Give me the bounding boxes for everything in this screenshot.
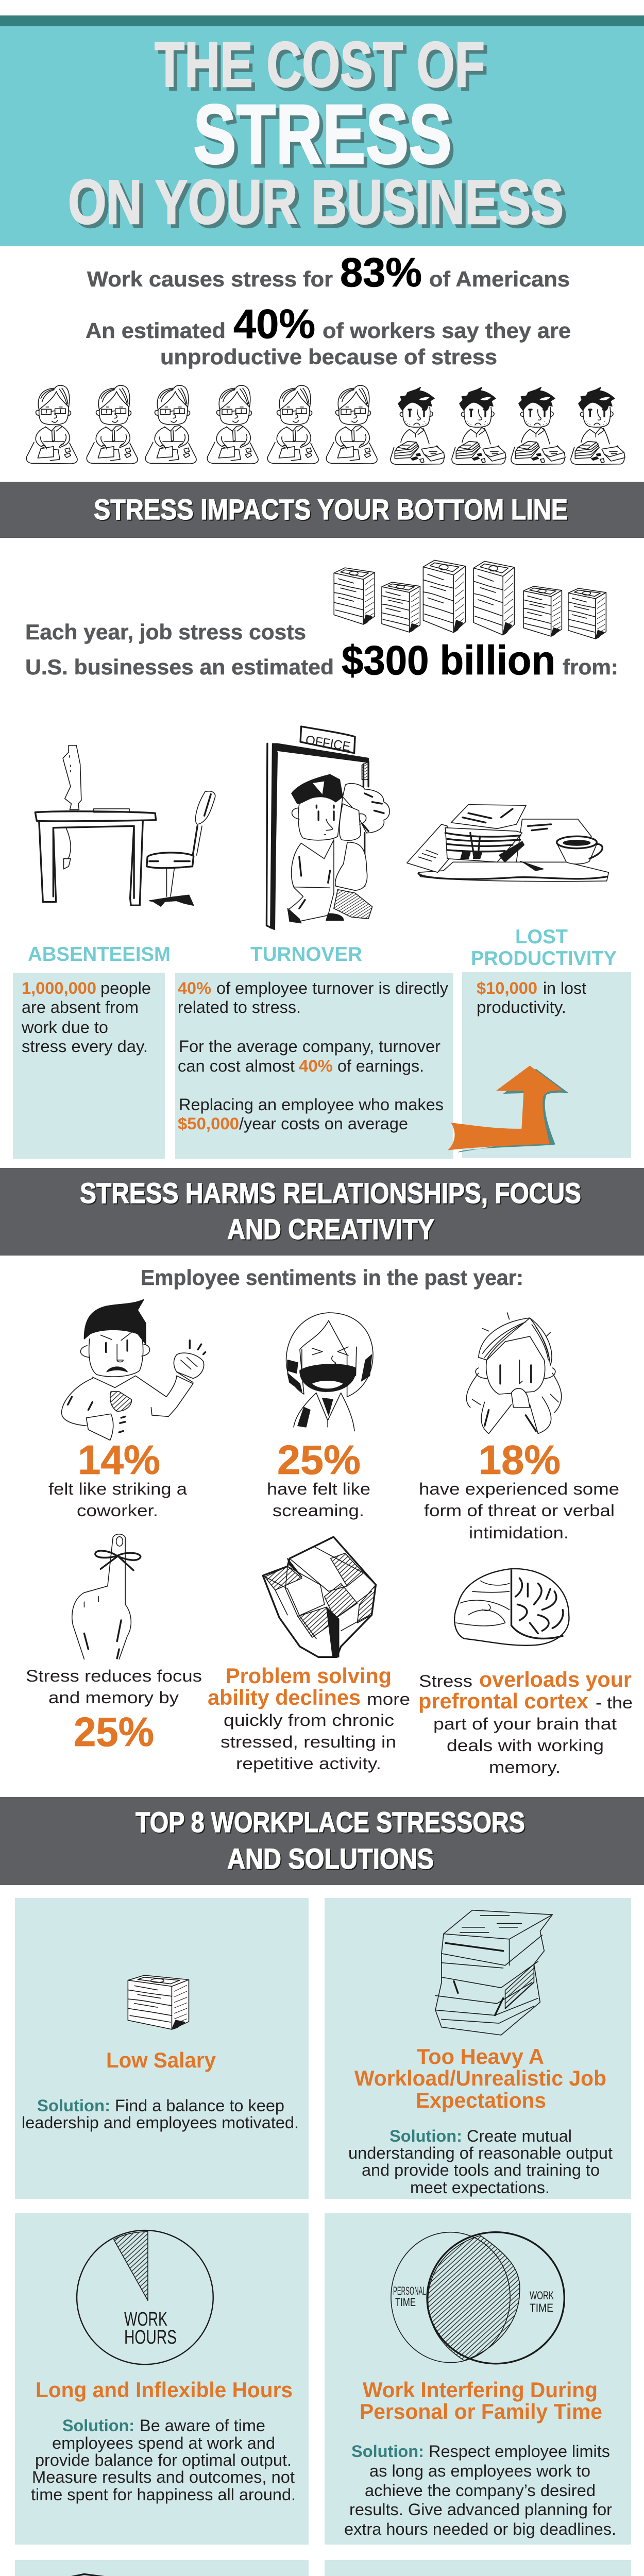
section band: bottom line: STRESS IMPACTS YOUR BOTTOM LINE [94, 493, 568, 526]
stat: $300 billion: U.S. businesses an estimated [25, 655, 334, 679]
panel: turnover: related to stress. [178, 998, 301, 1016]
panel: absenteeism: 1,000,000 [22, 979, 96, 997]
heading: absenteeism: ABSENTEEISM [28, 943, 171, 965]
text: problem solving: stressed, resulting in [221, 1733, 396, 1751]
stat: 40% of workers: of workers say they are [323, 318, 571, 343]
panel: turnover [175, 973, 453, 1159]
solution text: Be aware of time [140, 2416, 265, 2435]
stat: 25 percent screaming: 25% [277, 1437, 361, 1483]
text: prefrontal cortex: deals with working [447, 1736, 604, 1755]
panel: absenteeism: work due to [21, 1018, 108, 1037]
panel: low salary [15, 1898, 309, 2199]
solution text: Solution: [37, 2096, 110, 2115]
heading: turnover: TURNOVER [250, 943, 362, 965]
office sign label: OFFICE [304, 733, 351, 754]
panel: turnover: Replacing an employee who makes [179, 1095, 444, 1114]
text: problem solving: Problem solving [226, 1664, 392, 1688]
solution text: leadership and employees motivated. [22, 2113, 299, 2132]
heading [360, 2378, 602, 2424]
text: focus and memory: and memory by [48, 1688, 179, 1707]
solution text [348, 2127, 613, 2197]
text: prefrontal cortex: prefrontal cortex [418, 1689, 589, 1713]
section band: top 8 stressors: TOP 8 WORKPLACE STRESSORS [135, 1806, 525, 1838]
icon: rubik cube [263, 1537, 376, 1657]
pictogram: ten workers [26, 385, 625, 465]
section band: bottom line [0, 482, 644, 538]
solution text: and provide tools and training to [362, 2161, 600, 2179]
icon: finger with bow [72, 1534, 141, 1659]
text: focus and memory: 25% [74, 1709, 154, 1755]
icon: angry man [62, 1299, 206, 1440]
solution text: Respect employee limits [429, 2442, 610, 2461]
stat: $300 billion [25, 620, 618, 683]
solution text: meet expectations. [410, 2178, 550, 2197]
text: prefrontal cortex: memory. [489, 1758, 561, 1776]
title panel [0, 26, 644, 246]
icon: money stack [128, 1975, 189, 2029]
solution text [22, 2096, 299, 2132]
stat: 18 percent: form of threat or verbal [424, 1501, 615, 1520]
solution text [31, 2416, 296, 2504]
panel: lack of opportunity [15, 2560, 309, 2576]
chart: venn diagram: WORK [530, 2289, 554, 2302]
panel: absenteeism: stress every day. [22, 1037, 148, 1056]
panel: work interfering [325, 2213, 631, 2545]
icon: stairs and person [24, 2574, 272, 2576]
stat: $300 billion: $300 billion [342, 637, 555, 683]
text: problem solving: quickly from chronic [224, 1711, 394, 1730]
panel: long and inflexible hours [15, 2213, 309, 2545]
panel: turnover: For the average company, turnover [179, 1037, 440, 1056]
icon: stack of papers [435, 1910, 552, 2035]
stat: 83% of Americans: 83% [340, 249, 422, 295]
panel: too heavy a workload [325, 1898, 631, 2199]
solution text: provide balance for optimal output. [35, 2451, 292, 2469]
panel: absenteeism [13, 973, 165, 1159]
solution text: Solution: [351, 2442, 424, 2461]
text: problem solving [208, 1664, 410, 1773]
icon: empty desk and chair [35, 745, 215, 906]
text: prefrontal cortex: - the [596, 1693, 633, 1712]
section band: top 8 stressors [0, 1797, 644, 1885]
heading: Workload/Unrealistic Job [354, 2066, 606, 2090]
solution text: Create mutual [467, 2127, 572, 2145]
solution text: results. Give advanced planning for [349, 2500, 612, 2519]
panel: turnover: 40% [299, 1057, 333, 1075]
chart: work hours pie: WORK [124, 2309, 167, 2330]
section band: relationships: AND CREATIVITY [227, 1213, 434, 1245]
section band: top 8 stressors: AND SOLUTIONS [227, 1842, 434, 1875]
text: prefrontal cortex: overloads your [479, 1667, 632, 1691]
stat: 14 percent: 14% [78, 1437, 160, 1483]
solution text: extra hours needed or big deadlines. [344, 2520, 616, 2538]
text: problem solving: repetitive activity. [236, 1754, 381, 1773]
chart: venn diagram [391, 2232, 564, 2364]
text: problem solving: ability declines [208, 1685, 361, 1709]
stat: 14 percent: coworker. [77, 1501, 158, 1520]
heading: lost productivity: PRODUCTIVITY [471, 947, 617, 970]
panel: turnover: can cost almost [178, 1057, 295, 1075]
heading: lost productivity: LOST [515, 926, 568, 948]
icon: money stacks [334, 560, 606, 639]
stat: 25 percent screaming [267, 1437, 370, 1520]
chart: work hours pie [77, 2230, 213, 2364]
icon: office door with two people [266, 726, 389, 929]
solution text [344, 2442, 616, 2538]
stat: 83% of Americans [87, 249, 570, 295]
top accent bar [0, 15, 644, 26]
chart: work hours pie: HOURS [124, 2327, 177, 2348]
heading [354, 2044, 606, 2112]
heading: Expectations [416, 2088, 546, 2112]
heading: low salary: Low Salary [106, 2048, 216, 2072]
panel: lost productivity [462, 972, 631, 1158]
solution text: Measure results and outcomes, not [32, 2468, 295, 2486]
stat: $300 billion: from: [563, 655, 618, 679]
panel: turnover: 40% [178, 979, 211, 997]
panel: turnover: of employee turnover is directly [216, 979, 448, 997]
panel: lost productivity: productivity. [477, 998, 566, 1016]
icon: brain [454, 1569, 569, 1646]
icon: screaming woman [286, 1313, 373, 1431]
stat: 25 percent screaming: have felt like [267, 1480, 370, 1498]
text: focus and memory: Stress reduces focus [26, 1667, 202, 1685]
heading: Too Heavy A [417, 2044, 544, 2069]
solution text: achieve the company’s desired [365, 2481, 596, 2500]
stat: 18 percent: 18% [479, 1437, 561, 1483]
heading: lost productivity [471, 926, 617, 970]
heading: Work Interfering During [363, 2378, 598, 2402]
panel: turnover: /year costs on average [239, 1114, 408, 1133]
text: problem solving: more [367, 1690, 410, 1708]
stat: 40% of workers: An estimated [86, 318, 226, 343]
solution text: Find a balance to keep [115, 2096, 284, 2115]
panel: absenteeism: are absent from [22, 998, 139, 1016]
section band: relationships [0, 1168, 644, 1256]
chart: venn diagram: TIME [395, 2296, 416, 2309]
chart: venn diagram: PERSONAL [393, 2284, 426, 2297]
panel: turnover: $50,000 [178, 1114, 239, 1133]
text: focus and memory [26, 1667, 202, 1755]
stat: 14 percent [48, 1437, 187, 1520]
stat: 40% of workers: unproductive because of stress [160, 345, 497, 369]
stat: 18 percent: intimidation. [469, 1523, 569, 1542]
panel: lost productivity: in lost [543, 979, 586, 997]
stat: $300 billion: Each year, job stress costs [25, 620, 306, 644]
chart: venn diagram: TIME [530, 2301, 553, 2314]
solution text: Solution: [62, 2416, 134, 2435]
stat: 25 percent screaming: screaming. [273, 1501, 364, 1520]
subheading: sentiments: Employee sentiments in the past year: [141, 1265, 523, 1290]
stat: 18 percent: have experienced some [419, 1480, 619, 1498]
stat: 40% of workers [86, 301, 571, 369]
text: prefrontal cortex: part of your brain that [433, 1715, 617, 1733]
heading: Personal or Family Time [360, 2399, 602, 2424]
panel: turnover: of earnings. [337, 1057, 424, 1075]
solution text: time spent for happiness all around. [31, 2485, 296, 2504]
panel: lost productivity: $10,000 [477, 979, 537, 997]
title line: the cost of: THE COST OF [155, 29, 485, 100]
icon: fearful woman [466, 1313, 562, 1434]
solution text: as long as employees work to [369, 2462, 590, 2480]
heading: Long and Inflexible Hours [36, 2378, 293, 2402]
solution text: employees spend at work and [52, 2434, 275, 2452]
stat: 40% of workers: 40% [233, 301, 315, 347]
panel: absenteeism: people [100, 979, 151, 997]
panel: lack of participation [325, 2560, 631, 2576]
text: prefrontal cortex [418, 1667, 633, 1776]
stat: 18 percent [419, 1437, 619, 1542]
stat: 83% of Americans: of Americans [429, 267, 570, 291]
solution text: Solution: [389, 2127, 462, 2145]
arrow: orange upward [448, 1065, 569, 1153]
icon: paperwork and coffee [407, 805, 608, 882]
solution text: understanding of reasonable output [348, 2144, 613, 2162]
title line: stress: STRESS [193, 87, 452, 181]
text: prefrontal cortex: Stress [419, 1672, 472, 1690]
stat: 14 percent: felt like striking a [48, 1480, 187, 1498]
stat: 83% of Americans: Work causes stress for [87, 267, 333, 291]
